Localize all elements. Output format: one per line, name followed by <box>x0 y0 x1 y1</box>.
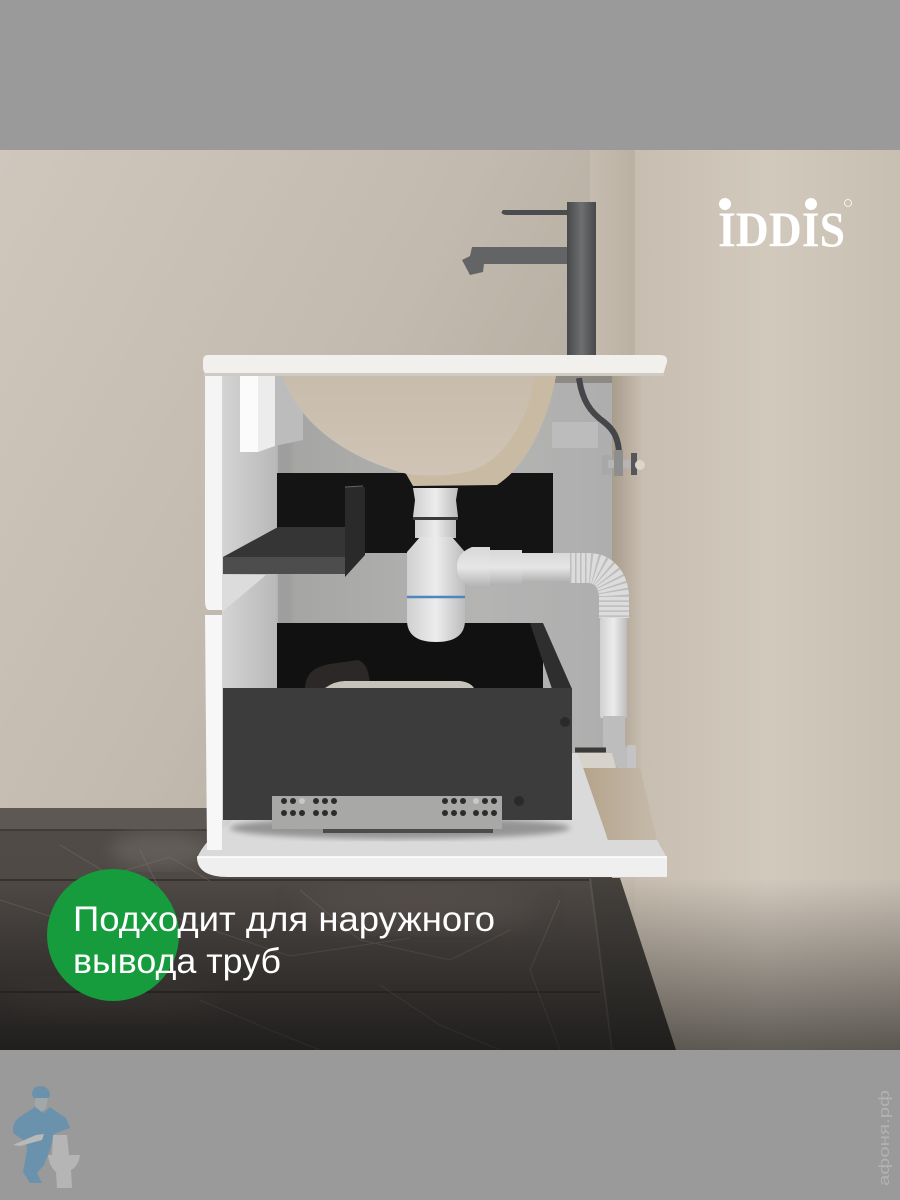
shelf front edge <box>197 857 667 877</box>
gray bracket <box>552 422 598 448</box>
siphon body <box>407 537 465 642</box>
vanity cabinet interior <box>222 374 645 836</box>
siphon neck <box>413 488 458 538</box>
caption text: Подходит для наружного <box>73 900 495 939</box>
plumber figure <box>13 1086 70 1183</box>
blue ring <box>407 596 465 598</box>
white hanger block <box>240 374 303 452</box>
faucet <box>462 202 596 355</box>
metal plate <box>272 796 502 829</box>
drawer shelf <box>222 486 365 612</box>
left interior wall <box>222 376 278 836</box>
lower drawer front <box>223 688 572 829</box>
watermark text: афоня.рф <box>876 1090 893 1186</box>
vertical drain pipe <box>600 618 627 718</box>
top grey band <box>0 0 900 150</box>
drawer inside <box>277 623 543 689</box>
horizontal drain connector <box>457 547 573 588</box>
lower elbow <box>614 716 632 760</box>
countertop <box>203 355 667 376</box>
bottom grey band <box>0 1050 900 1200</box>
faucet column <box>567 202 596 355</box>
sink basin <box>282 375 535 476</box>
green circle <box>47 869 179 1001</box>
angle valve <box>602 450 645 476</box>
siphon and drain pipe <box>407 488 636 775</box>
plumber watermark icon <box>13 1086 80 1188</box>
caption text: вывода труб <box>73 942 281 981</box>
bottom shelf <box>197 750 667 877</box>
faucet lever <box>502 210 570 215</box>
faucet spout <box>462 247 568 275</box>
dark pipe in drawer <box>305 660 370 689</box>
back panel <box>278 376 612 836</box>
drawer front <box>223 688 572 820</box>
left front panels <box>205 376 222 850</box>
drawer side <box>530 623 572 689</box>
corrugated elbow <box>570 568 614 618</box>
drawer front screws <box>514 717 570 806</box>
shelf top surface <box>197 753 667 858</box>
lower drawer interior <box>277 623 572 689</box>
logo: IDDIS: IDDIS <box>718 201 845 257</box>
caption text <box>73 900 495 981</box>
toilet figure <box>48 1135 80 1188</box>
black storage box <box>277 473 553 553</box>
flexible hose <box>579 378 619 452</box>
bathroom background <box>0 150 900 1050</box>
white tray <box>325 681 474 688</box>
basin outer shell <box>405 376 556 486</box>
under-counter bracket <box>555 376 612 383</box>
shelf cutout <box>583 768 657 840</box>
